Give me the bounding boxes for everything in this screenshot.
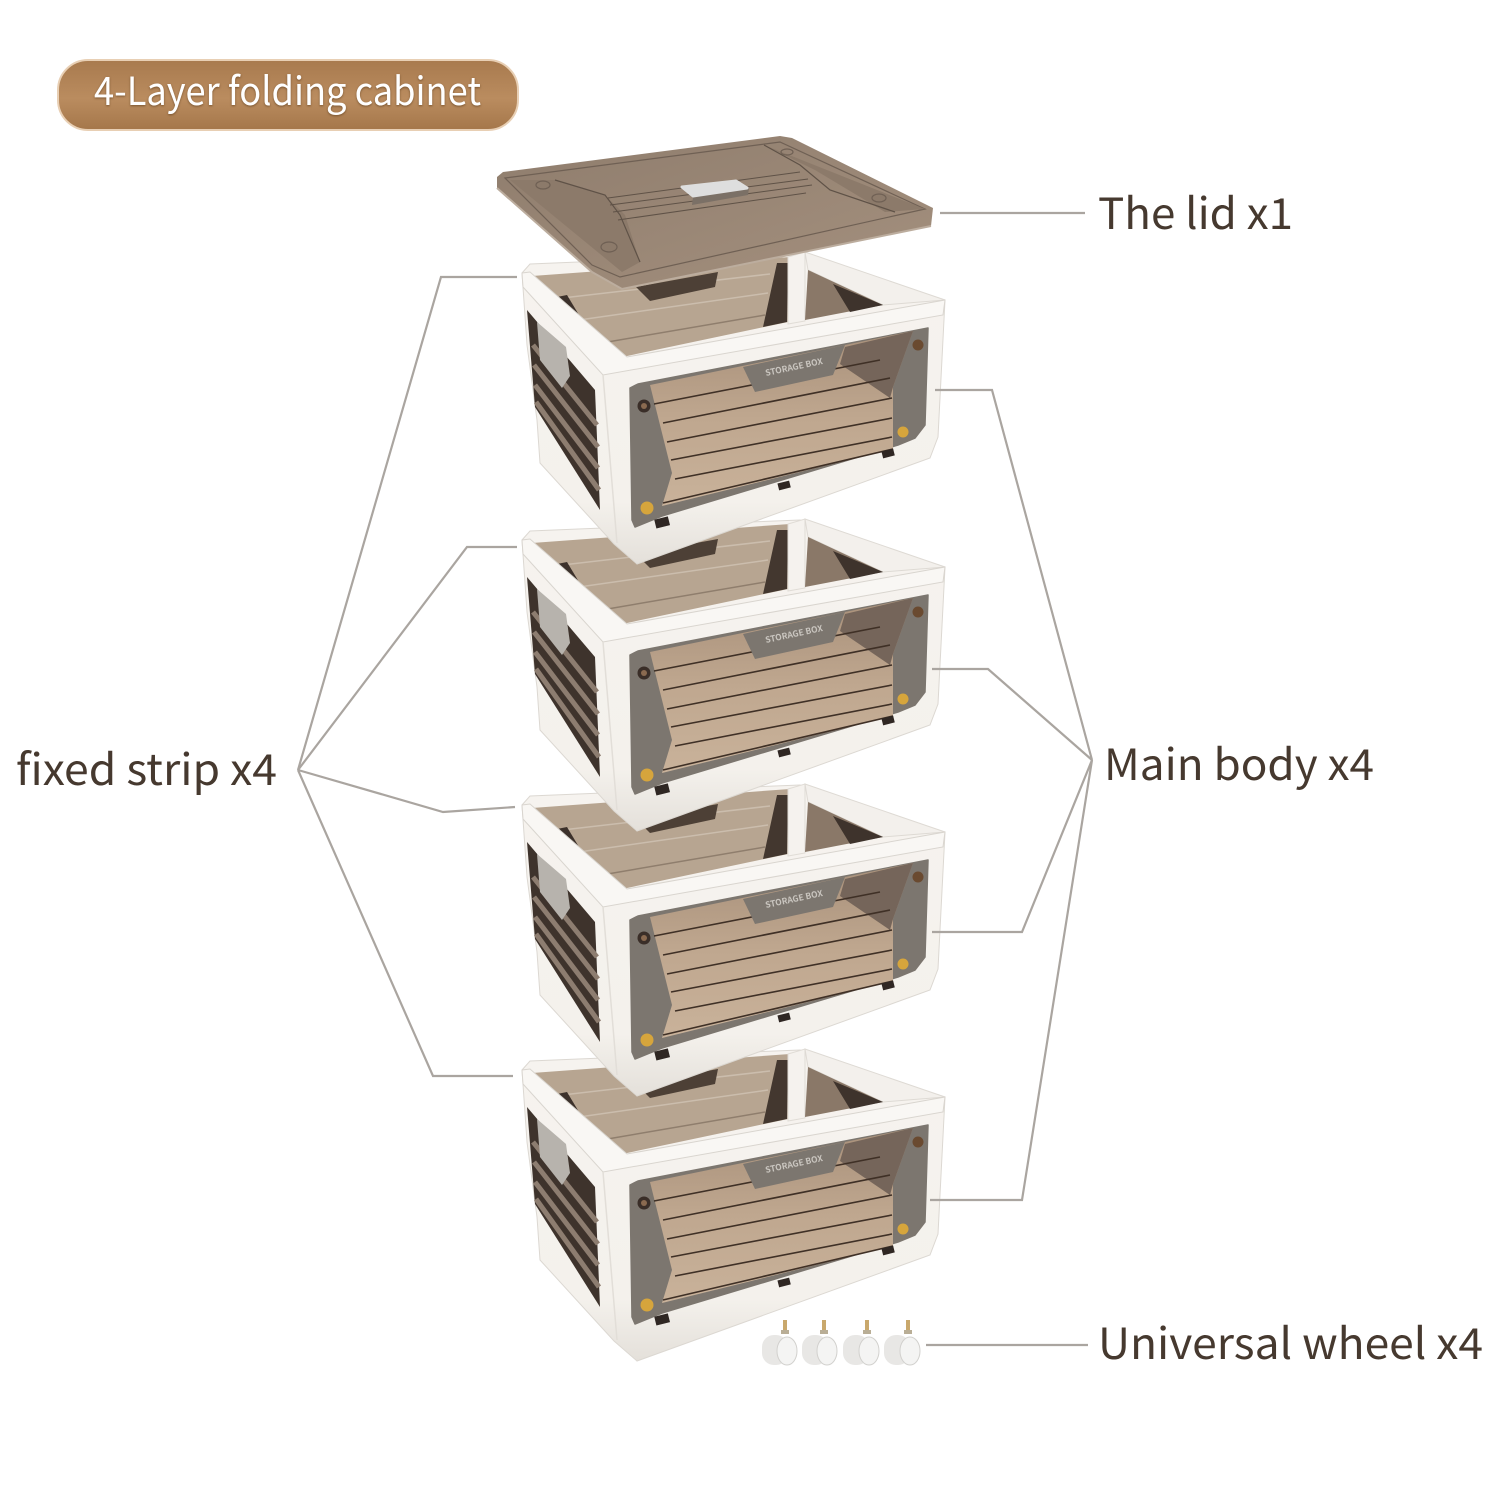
storage box layer 3: STORAGE BOX xyxy=(764,887,824,911)
storage box layer 1: STORAGE BOX xyxy=(764,355,824,379)
title pill: 4-Layer folding cabinet: 4-Layer folding cabinet xyxy=(94,61,481,117)
label: Main body: Main body x4 xyxy=(1104,731,1374,793)
label: fixed strip: fixed strip x4 xyxy=(16,736,277,798)
storage box layer 1 xyxy=(522,252,945,564)
leader line: lid xyxy=(940,212,1085,214)
wheel 2 xyxy=(802,1320,837,1365)
storage box layer 4: STORAGE BOX xyxy=(764,1152,824,1176)
wheel 4 xyxy=(884,1320,920,1365)
leader line: fixed strip connectors xyxy=(298,277,517,1076)
storage box layer 2: STORAGE BOX xyxy=(764,622,824,646)
label: The lid: The lid x1 xyxy=(1098,180,1293,242)
universal wheels x4 xyxy=(762,1320,920,1365)
storage box layer 3 xyxy=(522,784,945,1096)
label: Universal wheel: Universal wheel x4 xyxy=(1098,1310,1483,1372)
storage box layer 4 xyxy=(522,1049,945,1361)
wheel 1 xyxy=(762,1320,797,1365)
leader line: wheels xyxy=(926,1344,1088,1346)
storage box layer 2 xyxy=(522,519,945,831)
leader line: main body connectors xyxy=(930,390,1092,1200)
lid xyxy=(497,136,933,289)
wheel 3 xyxy=(843,1320,879,1365)
